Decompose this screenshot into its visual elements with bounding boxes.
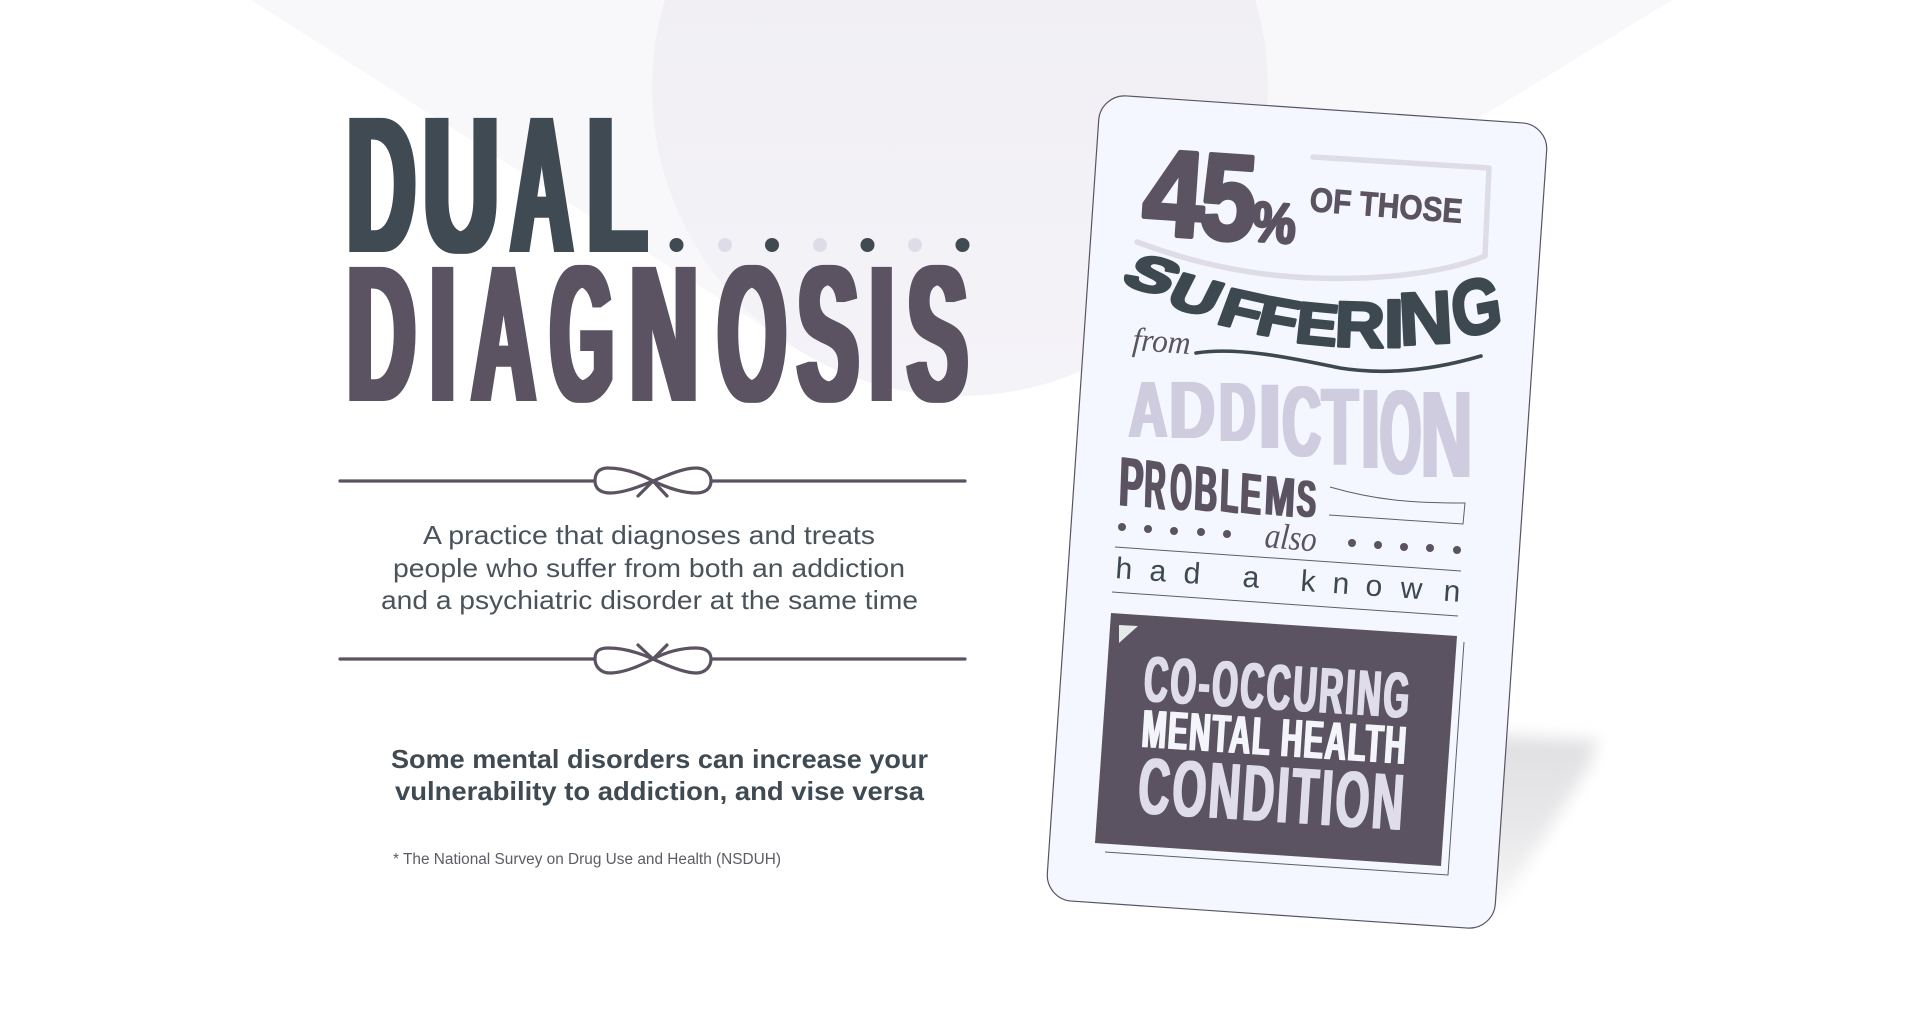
title: DIAGNOSIS <box>347 225 968 443</box>
title: DUAL: A <box>511 76 572 294</box>
text: SUFFERING arc: E <box>1293 290 1341 359</box>
footnote: * The National Survey on Drug Use and Health (NSDUH) <box>393 851 781 868</box>
text: ADDICTION: A <box>1129 365 1167 454</box>
bold statement: Some mental disorders can increase your <box>391 744 928 774</box>
text: PROBLEMS: E <box>1239 461 1264 527</box>
text: PROBLEMS: B <box>1193 452 1221 525</box>
card background <box>1046 94 1548 930</box>
card shadow <box>1482 735 1598 905</box>
text: ADDICTION: N <box>1421 367 1472 504</box>
ribbon divider top <box>340 468 965 496</box>
stat frame <box>1137 157 1489 278</box>
text: ADDICTION <box>1129 365 1472 504</box>
script: also: also <box>1263 515 1319 560</box>
title: DUAL: D <box>347 76 416 294</box>
thin offset frame of dark box <box>1105 642 1464 875</box>
text: ADDICTION: I <box>1361 366 1380 492</box>
stat: 45%: % <box>1250 190 1298 256</box>
infographic canvas: S <box>908 225 968 443</box>
text: ADDICTION: O <box>1380 366 1421 500</box>
text: SUFFERING arc: F <box>1212 278 1268 346</box>
rule lines <box>1112 547 1461 616</box>
text: ADDICTION: D <box>1219 365 1255 459</box>
text: PROBLEMS: M <box>1263 463 1298 528</box>
title: DUAL: U <box>423 76 499 294</box>
script: from: from <box>1131 322 1192 362</box>
title: DIAGNOSIS: I <box>870 225 894 443</box>
stat: 45%: 5 <box>1196 127 1261 267</box>
title: DIAGNOSIS: G <box>550 225 614 443</box>
text: ADDICTION: I <box>1258 366 1282 468</box>
title: DIAGNOSIS: S <box>798 225 858 443</box>
wave line <box>1196 351 1481 371</box>
ribbon divider bottom <box>340 645 965 673</box>
bold statement <box>391 744 928 806</box>
text: SUFFERING arc: N <box>1396 275 1455 361</box>
text: PROBLEMS: S <box>1295 470 1319 529</box>
text: PROBLEMS: P <box>1117 442 1147 522</box>
dark condition box <box>1095 613 1457 866</box>
description paragraph: and a psychiatric disorder at the same time <box>381 585 918 615</box>
title: DIAGNOSIS: A <box>472 225 535 443</box>
thin box beside PROBLEMS <box>1329 487 1465 524</box>
title dots <box>670 238 970 252</box>
title: DUAL: L <box>587 76 647 294</box>
title: DIAGNOSIS: I <box>430 225 455 443</box>
description paragraph: people who suffer from both an addiction <box>393 553 905 583</box>
text: CO-OCCURING: CO-OCCURING <box>1142 642 1414 732</box>
bold statement: vulnerability to addiction, and vise versa <box>395 776 925 806</box>
text: CONDITION: CONDITION <box>1136 741 1409 847</box>
text: ADDICTION: D <box>1169 365 1215 456</box>
background: large pale circle <box>652 0 1268 396</box>
title: DIAGNOSIS: N <box>630 225 698 443</box>
text: SUFFERING arc: F <box>1252 284 1304 353</box>
title: DIAGNOSIS: O <box>718 225 786 443</box>
description paragraph: A practice that diagnoses and treats <box>423 520 875 550</box>
title: DIAGNOSIS: D <box>347 225 416 443</box>
corner triangle <box>1119 625 1138 643</box>
text: had a known: had a known <box>1115 552 1461 609</box>
text: PROBLEMS: R <box>1143 446 1169 523</box>
dot row <box>1118 523 1461 554</box>
stat: 45%: 4 <box>1139 123 1209 263</box>
text: PROBLEMS <box>1117 442 1319 529</box>
text: OF THOSE: OF THOSE <box>1308 181 1464 231</box>
text: ADDICTION: C <box>1282 366 1321 478</box>
text: ADDICTION: T <box>1322 366 1358 489</box>
text: SUFFERING arc: R <box>1334 288 1386 362</box>
panel: statistic card <box>1046 94 1548 930</box>
text: SUFFERING arc: I <box>1384 286 1404 362</box>
text: SUFFERING arc: G <box>1444 260 1507 355</box>
description paragraph <box>381 520 918 615</box>
background: pale cone shape <box>251 0 1672 350</box>
text: SUFFERING arc: U <box>1160 263 1226 332</box>
text: MENTAL HEALTH: MENTAL HEALTH <box>1140 699 1410 776</box>
text: PROBLEMS: L <box>1219 456 1242 526</box>
title: DUAL <box>347 76 647 294</box>
text: PROBLEMS: O <box>1169 448 1195 523</box>
text: SUFFERING arc: S <box>1114 245 1182 314</box>
